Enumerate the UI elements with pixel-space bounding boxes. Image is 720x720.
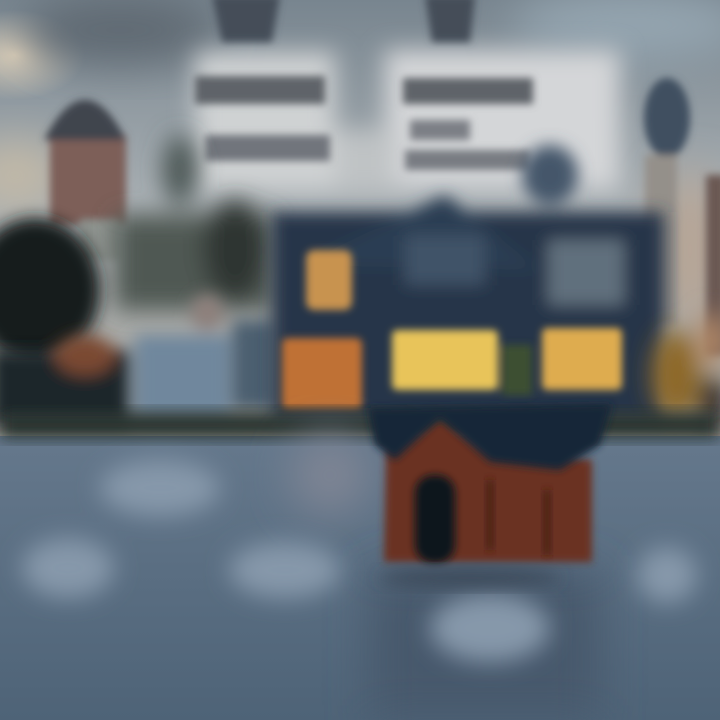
mid trees [115, 135, 275, 310]
doghouse [368, 404, 612, 588]
ground label blobs [22, 460, 697, 662]
sign top caps [212, 0, 475, 42]
left brick tower [44, 100, 126, 260]
sky [0, 0, 720, 440]
top white sign panels [195, 50, 620, 195]
left dark tree [0, 218, 100, 362]
ground [0, 412, 720, 720]
left low buildings [0, 294, 277, 425]
house body [272, 145, 664, 422]
blurred sign text marks [195, 76, 533, 170]
lit windows [282, 250, 622, 410]
right glow [651, 312, 720, 425]
right tower [644, 78, 720, 355]
